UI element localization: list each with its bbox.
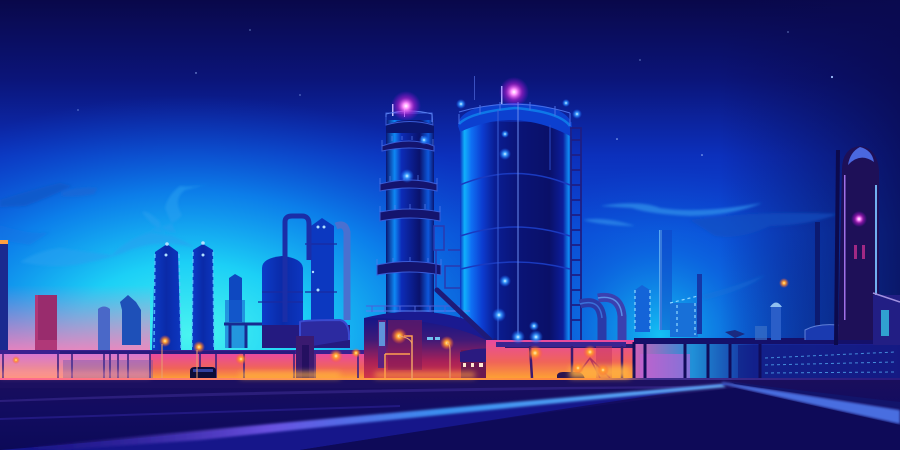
main column tower (377, 103, 441, 315)
wispy clouds right (583, 203, 838, 300)
big storage tank (458, 76, 572, 342)
right pipe rack (634, 338, 900, 380)
distant refinery: far left (0, 240, 141, 350)
horizon glow line (0, 378, 900, 381)
side ladder structures (434, 226, 462, 290)
diagonal stairs (437, 290, 532, 378)
central-left process unit with pipes (164, 216, 350, 348)
ground and road (0, 380, 900, 450)
base building under tower (364, 306, 513, 380)
wispy clouds left (0, 182, 217, 266)
right main pipework (580, 297, 622, 345)
distant columns: left cluster (152, 244, 245, 350)
stars (77, 29, 833, 156)
tank staircase (570, 128, 581, 342)
lamps and lights (12, 77, 867, 380)
central deck (486, 340, 636, 380)
vehicles (190, 367, 585, 380)
tower platform railings (377, 113, 441, 275)
distant right columns (635, 222, 845, 340)
orange glow along deck (0, 366, 630, 378)
left pipe rack deck (0, 336, 365, 380)
far-right dark tower (836, 146, 900, 345)
